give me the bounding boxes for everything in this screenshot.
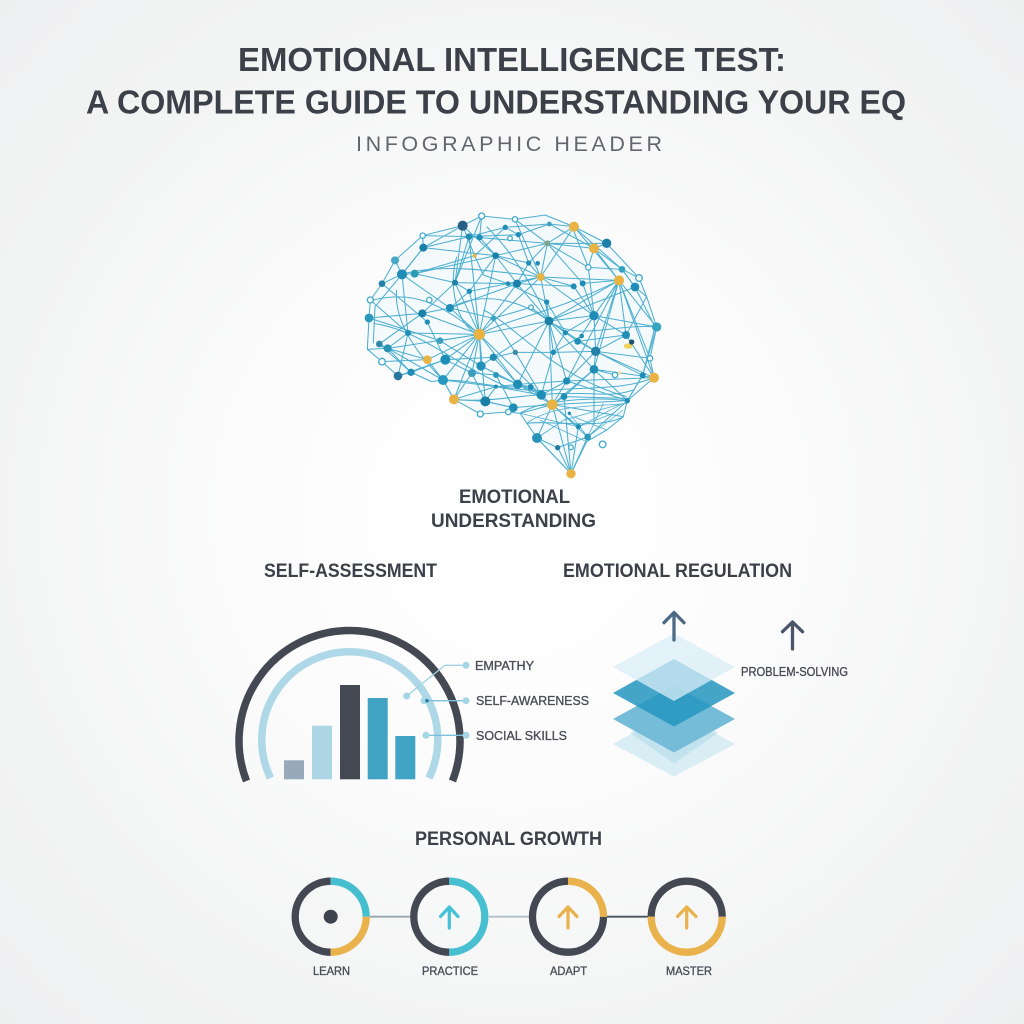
brain caption: UNDERSTANDING [431,511,596,532]
arrow: regulation up [664,612,684,640]
heading: self-assessment: SELF-ASSESSMENT [264,561,437,582]
label: problem-solving: PROBLEM-SOLVING [741,665,848,679]
brain caption: EMOTIONAL [459,487,570,508]
callout: self-awareness: SELF-AWARENESS [476,693,589,708]
step: adapt: ADAPT [550,964,588,978]
title: A COMPLETE GUIDE TO UNDERSTANDING YOUR EQ [86,84,906,122]
step: learn: LEARN [313,964,350,978]
callout: empathy: EMPATHY [475,658,534,673]
title: EMOTIONAL INTELLIGENCE TEST: [238,42,786,79]
arrow: problem-solving up [782,622,802,649]
step: master: MASTER [666,964,712,978]
subtitle: INFOGRAPHIC HEADER [356,132,662,156]
brain network illustration [365,213,661,478]
gauge arcs [239,630,460,781]
title [86,42,906,122]
gold nodes [423,222,659,478]
step: master [651,881,722,978]
callout: self-awareness [420,693,589,708]
self-assessment gauge chart [239,630,589,781]
callout: social skills [422,728,567,743]
bar chart [284,685,415,779]
hollow nodes [367,213,653,450]
step: practice: PRACTICE [422,964,478,978]
step: practice [414,881,485,978]
callout: social skills: SOCIAL SKILLS [476,728,567,743]
heading: personal growth: PERSONAL GROWTH [415,829,602,850]
stacked layers icon [613,634,735,776]
blue nodes [365,221,661,450]
step: adapt [532,881,604,978]
brain caption [431,487,596,532]
step: learn [295,881,366,978]
heading: emotional regulation: EMOTIONAL REGULATION [563,561,792,582]
callout: empathy [403,658,534,700]
connector lines [370,916,648,918]
